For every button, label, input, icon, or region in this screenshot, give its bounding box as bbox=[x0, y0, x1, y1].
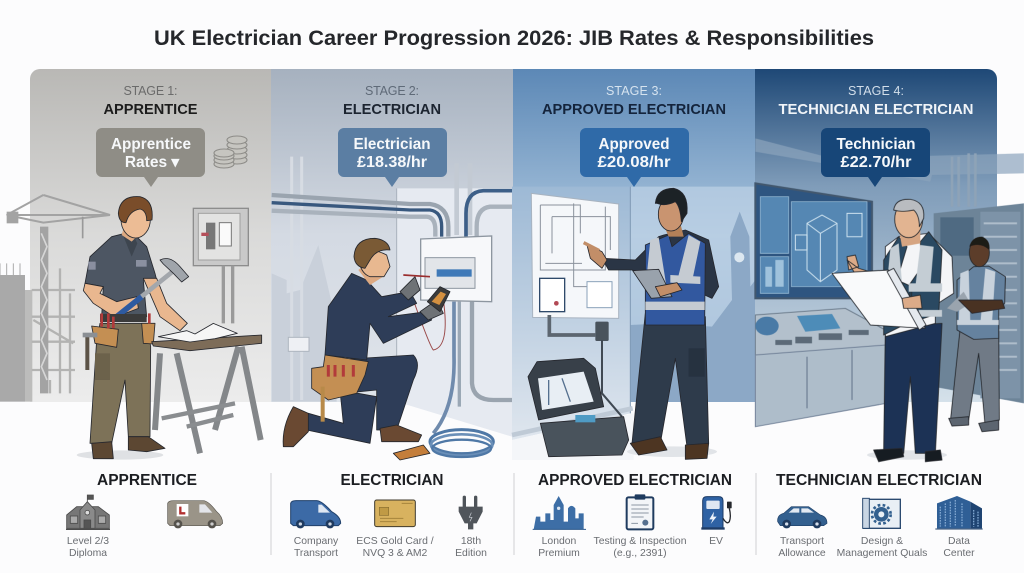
label: Transport bbox=[780, 536, 824, 547]
title: UK Electrician Career Progression 2026: JIB Rates & Responsibilities bbox=[154, 27, 874, 50]
icon: clipboard bbox=[627, 494, 653, 529]
illustration: apprentice at workbench bbox=[0, 195, 262, 460]
stage label: STAGE 3: bbox=[606, 84, 662, 98]
panel: stage 2 electrician bbox=[271, 69, 513, 460]
icon: London skyline bbox=[533, 496, 586, 529]
footer: approved electrician bbox=[533, 472, 732, 559]
footer: electrician bbox=[291, 472, 487, 559]
rate callout bbox=[96, 128, 205, 187]
label line 2: (e.g., 2391) bbox=[613, 548, 667, 559]
icon: company van bbox=[291, 501, 341, 528]
label: 18th bbox=[461, 536, 481, 547]
rate callout bbox=[580, 128, 689, 187]
illustration: technician with blueprint bbox=[755, 138, 1024, 462]
stage label: STAGE 4: bbox=[848, 84, 904, 98]
label line 2: Premium bbox=[538, 548, 580, 559]
rate callout: Apprentice bbox=[111, 136, 191, 153]
heading: ELECTRICIAN bbox=[340, 472, 444, 489]
rate callout: Approved bbox=[598, 136, 670, 153]
panel: stage 3 approved electrician bbox=[512, 69, 755, 460]
rate callout: Electrician bbox=[354, 136, 430, 153]
icon: data center bbox=[935, 496, 983, 529]
rate callout bbox=[821, 128, 930, 187]
heading: APPRENTICE bbox=[97, 472, 197, 489]
label line 2: Management Quals bbox=[837, 548, 927, 559]
label line 2: Center bbox=[943, 548, 975, 559]
panel: stage 1 apprentice bbox=[0, 69, 271, 460]
rate callout: £20.08/hr bbox=[598, 154, 670, 171]
illustration: approved electrician with test kit bbox=[512, 187, 755, 460]
stage label: STAGE 2: bbox=[365, 84, 419, 98]
rate callout: £22.70/hr bbox=[840, 154, 912, 171]
heading: APPROVED ELECTRICIAN bbox=[538, 472, 732, 489]
stage name: APPRENTICE bbox=[104, 102, 198, 118]
label: ECS Gold Card / bbox=[356, 536, 434, 547]
rate callout: £18.38/hr bbox=[357, 154, 427, 171]
icon: car bbox=[778, 507, 827, 528]
label: Data bbox=[948, 536, 970, 547]
label: Testing & Inspection bbox=[594, 536, 687, 547]
label: Design & bbox=[861, 536, 903, 547]
icon: EV charger bbox=[701, 497, 732, 530]
stage name: APPROVED ELECTRICIAN bbox=[542, 102, 726, 118]
label line 2: Allowance bbox=[778, 548, 826, 559]
icon: plug bbox=[459, 497, 483, 529]
icon: coins bbox=[214, 136, 247, 168]
stage name: ELECTRICIAN bbox=[343, 102, 441, 118]
label line 2: Diploma bbox=[69, 548, 107, 559]
rate callout: Rates ▾ bbox=[125, 154, 180, 171]
icon: ECS gold card bbox=[375, 500, 415, 527]
label: London bbox=[542, 536, 577, 547]
heading: TECHNICIAN ELECTRICIAN bbox=[776, 472, 982, 489]
rate callout: Technician bbox=[836, 136, 916, 153]
panel: stage 4 technician electrician bbox=[755, 69, 1024, 462]
stage name: TECHNICIAN ELECTRICIAN bbox=[778, 102, 974, 118]
label line 2: Edition bbox=[455, 548, 487, 559]
icon: L-plate van bbox=[168, 501, 223, 528]
footer: apprentice bbox=[66, 472, 223, 559]
illustration: electrician at consumer unit bbox=[272, 157, 512, 460]
label line 2: Transport bbox=[294, 548, 338, 559]
icon: school building bbox=[66, 495, 110, 529]
rate callout bbox=[338, 128, 447, 187]
stage label: STAGE 1: bbox=[124, 84, 178, 98]
label: EV bbox=[709, 536, 723, 547]
footer: technician electrician bbox=[776, 472, 983, 559]
label line 2: NVQ 3 & AM2 bbox=[363, 548, 428, 559]
label: Company bbox=[294, 536, 339, 547]
icon: blueprint with gear bbox=[863, 498, 900, 528]
label: Level 2/3 bbox=[67, 536, 109, 547]
